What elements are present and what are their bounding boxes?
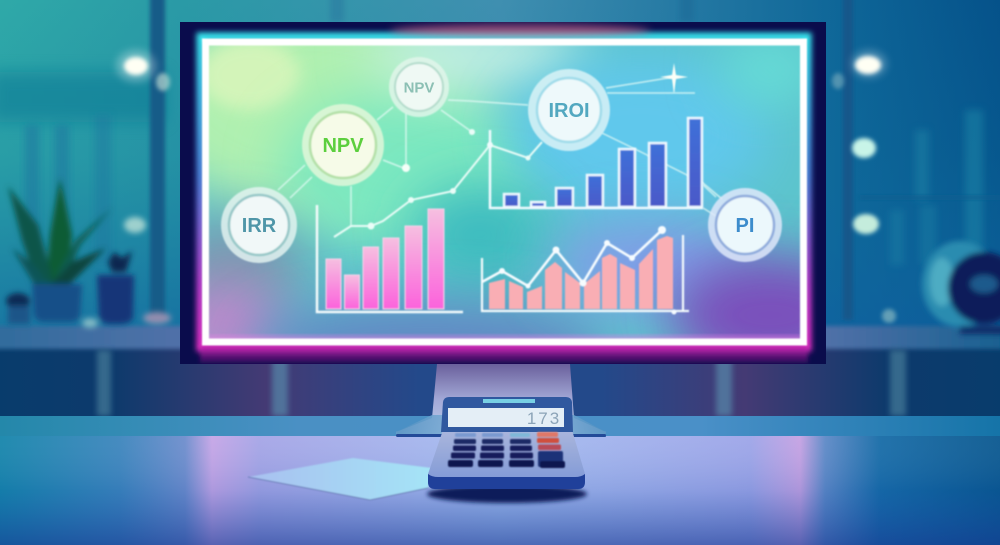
- desk back edge: [0, 416, 1000, 437]
- metric: PI: [708, 188, 782, 262]
- monitor: [180, 22, 826, 364]
- metric: NPV small: [389, 57, 449, 117]
- desk surface: [0, 436, 1000, 545]
- calculator: [427, 397, 587, 503]
- metric: NPV large: [302, 104, 384, 186]
- calculator keys: [448, 432, 565, 468]
- metric: IROI: IROI: [548, 100, 590, 122]
- blurred office background: [0, 0, 1000, 425]
- solar strip: [483, 399, 535, 403]
- monitor bezel: [180, 22, 826, 364]
- desk fan: [922, 241, 1000, 334]
- metric: PI: PI: [736, 215, 754, 237]
- metric: IROI: [528, 69, 610, 151]
- trend line: [334, 129, 542, 237]
- calculator top panel: [441, 397, 573, 432]
- connector lines: [278, 77, 722, 226]
- potted plants: [6, 178, 171, 328]
- metric: NPV large: NPV: [322, 135, 364, 157]
- calculator display: [448, 408, 564, 428]
- neon glow: [200, 24, 808, 363]
- neon frame: [206, 42, 804, 342]
- metric: NPV small: NPV: [404, 80, 434, 96]
- blue bar chart: [490, 118, 703, 208]
- sparkle star: [660, 63, 688, 91]
- calculator display: 173: [527, 409, 561, 428]
- pink area chart: [482, 226, 689, 314]
- paper sheet: [248, 458, 432, 500]
- screen background: [208, 44, 801, 340]
- metric: IRR: [221, 187, 297, 263]
- monitor stand: [396, 364, 606, 437]
- metric: IRR: IRR: [242, 215, 277, 237]
- shelf: [0, 326, 1000, 425]
- ceiling and wall lights: [116, 50, 896, 323]
- pink bar chart: [317, 205, 463, 312]
